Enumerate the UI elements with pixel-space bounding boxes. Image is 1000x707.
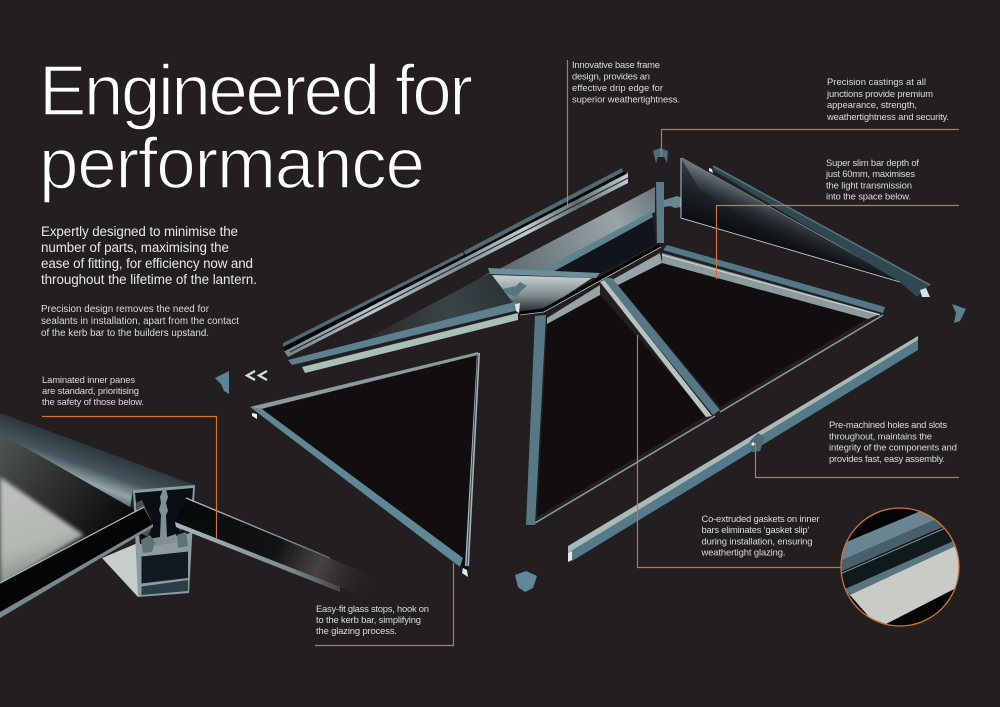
callout: castings bbox=[826, 76, 949, 122]
under hip panel bbox=[492, 275, 592, 312]
lower left silver frame bbox=[547, 285, 600, 324]
lower clip left bbox=[141, 535, 155, 553]
callout: base frame: superior weathertightness. bbox=[572, 94, 680, 104]
bar bracket bbox=[750, 433, 765, 452]
small top clip bbox=[709, 168, 713, 173]
pane lower bar bbox=[250, 407, 463, 567]
ridge bar bbox=[537, 212, 653, 274]
joint bracket bbox=[664, 196, 686, 208]
circle outline bbox=[841, 508, 959, 626]
right glass top edge bbox=[186, 498, 330, 558]
callout: laminated panes: the safety of those below. bbox=[42, 396, 144, 407]
callout: castings: appearance, strength, bbox=[827, 99, 917, 110]
callout: gaskets bbox=[700, 513, 820, 558]
callout: glass stops: the glazing process. bbox=[316, 625, 397, 636]
callout: castings: weathertightness and security. bbox=[826, 111, 949, 122]
left glass lower line bbox=[0, 524, 153, 618]
callout: laminated panes: are standard, prioritising bbox=[42, 385, 139, 396]
callout: glass stops bbox=[316, 603, 429, 636]
ridge white highlight bbox=[520, 247, 661, 315]
pale grey face bbox=[850, 544, 960, 624]
intro text: ease of fitting, for efficiency now and bbox=[41, 256, 253, 271]
black gasket bbox=[283, 172, 628, 351]
title bbox=[39, 52, 473, 204]
thin slate line bbox=[846, 542, 954, 596]
callout: bar depth: the light transmission bbox=[826, 180, 912, 190]
chevron arrows bbox=[247, 371, 267, 380]
corner node right bbox=[952, 304, 966, 323]
corner node top bbox=[653, 148, 668, 163]
callout: gaskets: Co-extruded gaskets on inner bbox=[702, 513, 820, 524]
secondary text: of the kerb bar to the builders upstand. bbox=[41, 328, 209, 339]
frame highlight bbox=[662, 255, 880, 315]
pane corner clips bbox=[252, 413, 257, 419]
hip bracket bbox=[503, 282, 527, 297]
ridge black line bbox=[520, 245, 660, 313]
gasket right bbox=[176, 501, 191, 531]
gasket left bbox=[136, 500, 153, 536]
front triangular glass pane bbox=[250, 352, 480, 577]
dark shaded glass bbox=[540, 215, 656, 274]
callout: bar depth: into the space below. bbox=[826, 190, 911, 202]
callout: laminated panes bbox=[42, 374, 144, 407]
main lantern glass panels bbox=[520, 245, 885, 525]
secondary text bbox=[41, 304, 239, 339]
slate bar bbox=[288, 302, 519, 365]
left trapezoid glass bbox=[537, 295, 707, 517]
end clip bbox=[920, 288, 930, 297]
slate shadow stripe bbox=[842, 520, 942, 571]
middle bar silver bbox=[600, 280, 712, 417]
bar slate face bbox=[568, 340, 918, 561]
lowest chamber bbox=[142, 580, 188, 595]
right trapezoid glass bbox=[618, 263, 870, 407]
vertical hip bar bbox=[656, 182, 664, 243]
callout: gaskets: bars eliminates ‘gasket slip’ bbox=[702, 524, 810, 535]
secondary text: sealants in installation, apart from the contact bbox=[41, 316, 239, 327]
callout: pre-machined holes: provides fast, easy assembly. bbox=[829, 453, 945, 464]
pane right edge bbox=[465, 353, 480, 566]
slate bar bbox=[713, 165, 930, 297]
corner node left bbox=[215, 371, 229, 394]
callout: base frame: Innovative base frame bbox=[572, 59, 660, 70]
title: Engineered for bbox=[39, 52, 473, 131]
top right frame slate bbox=[663, 245, 885, 313]
upper chamber bbox=[135, 488, 193, 544]
gasket detail circle bbox=[830, 507, 960, 626]
lower edge right bbox=[720, 315, 883, 412]
callout: pre-machined holes: throughout, maintains the bbox=[829, 430, 932, 442]
left glass surface bbox=[0, 433, 150, 590]
glass highlight bbox=[681, 158, 900, 282]
hypotenuse edge bbox=[682, 158, 900, 280]
bar highlight bbox=[713, 166, 930, 285]
callout: glass stops: to the kerb bar, simplifying bbox=[316, 614, 421, 625]
slate band bbox=[842, 512, 942, 560]
callout: base frame bbox=[572, 59, 680, 104]
left glass top line bbox=[0, 507, 144, 583]
pane top edge bbox=[250, 352, 478, 409]
long front bar bbox=[288, 302, 520, 373]
kerb bar cross-section detail bbox=[0, 413, 373, 618]
lower chamber bbox=[142, 552, 188, 584]
glazing bar strip top bbox=[283, 168, 628, 357]
lower clip right bbox=[177, 532, 188, 548]
intro text bbox=[41, 224, 257, 287]
callout: base frame: design, provides an bbox=[572, 70, 650, 82]
callout: laminated panes: Laminated inner panes bbox=[42, 374, 135, 385]
callout: bar depth bbox=[825, 157, 919, 202]
callout: pre-machined holes bbox=[829, 419, 957, 464]
left laminated glass edge bbox=[0, 507, 153, 617]
triangle glass bbox=[681, 158, 900, 282]
callout: castings: junctions provide premium bbox=[826, 88, 933, 99]
triangle white edge bbox=[681, 158, 900, 282]
kerb bar top face bbox=[0, 413, 195, 508]
callout: gaskets: weathertight glazing. bbox=[700, 546, 786, 558]
left vertical bar bbox=[526, 315, 546, 525]
slate edge left bbox=[283, 252, 464, 347]
secondary text: Precision design removes the need for bbox=[41, 304, 210, 315]
bottom bar bbox=[568, 336, 918, 562]
right laminated glass bbox=[175, 499, 373, 600]
callout: bar depth: Super slim bar depth of bbox=[826, 157, 919, 168]
callout: bar depth: just 60mm, maximises bbox=[825, 168, 915, 179]
intro text: throughout the lifetime of the lantern. bbox=[41, 272, 257, 287]
intro text: Expertly designed to minimise the bbox=[41, 224, 238, 239]
right glass lower edge bbox=[175, 522, 340, 592]
bar end teeth bbox=[515, 303, 520, 313]
rear glass bbox=[370, 187, 655, 337]
lower edge left bbox=[535, 416, 715, 523]
profile outline bbox=[133, 485, 195, 597]
upper right triangular pane bbox=[681, 158, 930, 297]
upper left silver frame bbox=[612, 253, 662, 285]
bar silver face bbox=[568, 336, 918, 553]
white side of profile bbox=[102, 542, 140, 597]
strip dark groove bbox=[290, 178, 628, 352]
callout: castings: Precision castings at all bbox=[827, 76, 926, 87]
bar end cap bbox=[568, 551, 572, 562]
corner node bottom bbox=[515, 571, 537, 592]
leader lines bbox=[42, 60, 959, 646]
silver strip bbox=[284, 172, 628, 357]
intro text: number of parts, maximising the bbox=[41, 240, 229, 255]
callout: pre-machined holes: integrity of the components and bbox=[829, 442, 957, 452]
callout: glass stops: Easy-fit glass stops, hook on bbox=[316, 603, 429, 614]
cross bar bbox=[488, 268, 600, 278]
callout: gaskets: during installation, ensuring bbox=[702, 536, 812, 546]
left glass section bbox=[370, 273, 516, 339]
callout: base frame: effective drip edge for bbox=[572, 82, 663, 93]
top right frame silver bbox=[662, 253, 880, 319]
gasket highlight bbox=[842, 528, 944, 574]
rear roof pane bbox=[370, 182, 686, 339]
title: performance bbox=[39, 125, 425, 204]
middle bar slate bbox=[602, 278, 720, 415]
pane glass bbox=[252, 352, 478, 572]
slate edge right bbox=[464, 168, 623, 255]
callout: pre-machined holes: Pre-machined holes and slots bbox=[829, 419, 947, 430]
bright reflection in glass bbox=[0, 477, 84, 586]
pale lower flange bbox=[302, 313, 518, 373]
central spine bbox=[149, 489, 177, 547]
dark gasket band bbox=[842, 527, 952, 588]
